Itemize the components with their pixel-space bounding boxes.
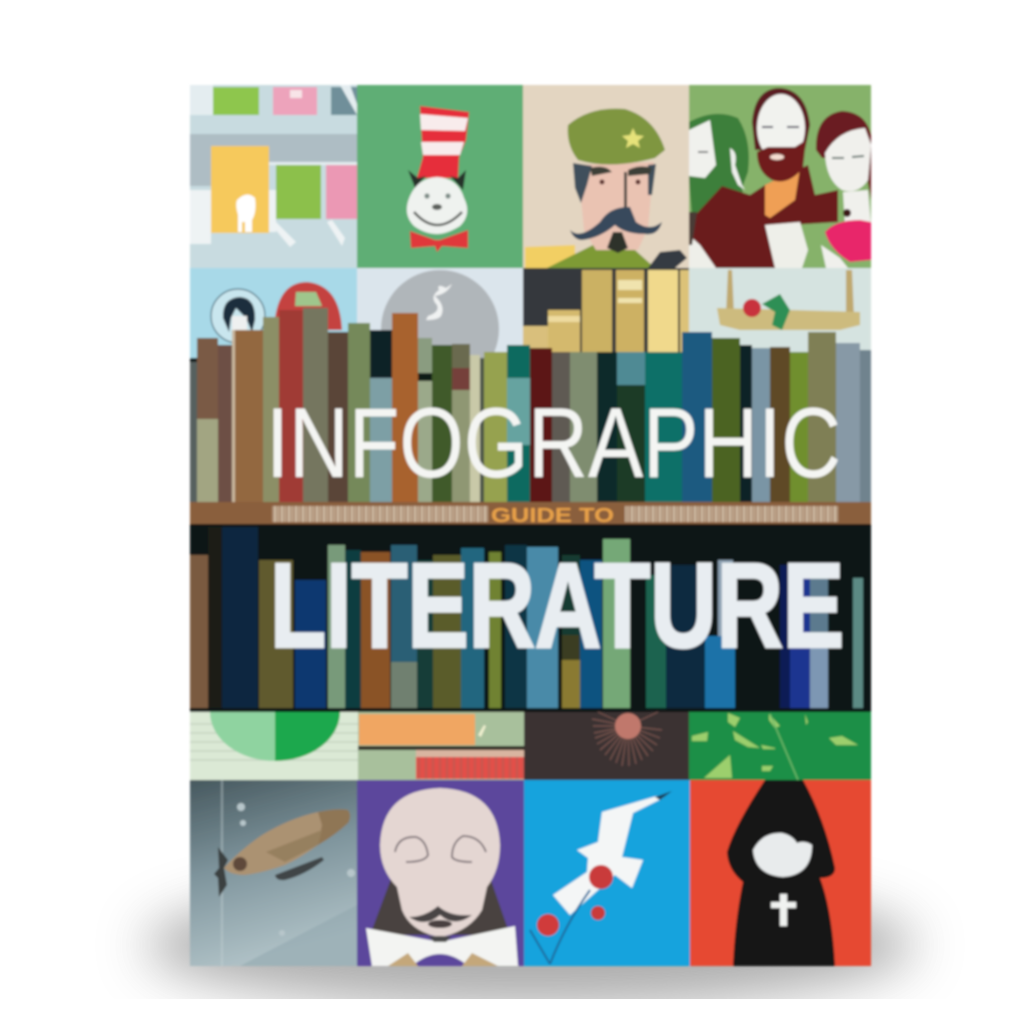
panel: revolutionary portrait <box>523 85 689 269</box>
moustache <box>409 906 472 942</box>
panel: nun <box>690 780 871 966</box>
bookshelf: lower row <box>190 524 871 712</box>
icon: habit <box>727 780 835 966</box>
face <box>578 162 654 250</box>
eyes <box>395 836 486 862</box>
figure: lower faces <box>765 222 808 268</box>
panel: gold books <box>523 268 689 358</box>
decorative bubbles <box>237 803 355 936</box>
icon: portrait circle <box>211 289 265 343</box>
panel: bearded group <box>689 85 871 269</box>
panel: portrait roundels <box>190 268 357 358</box>
hair <box>370 860 510 935</box>
figure: jacket <box>689 165 838 268</box>
figure: right woman <box>816 111 871 268</box>
panel: abstract building <box>190 85 357 269</box>
subtitle: GUIDE TO: GUIDE TO <box>491 505 614 527</box>
icon: cat face <box>407 177 467 234</box>
panel: rose on tray <box>689 268 871 352</box>
beret <box>568 109 665 165</box>
panel: green semicircle <box>190 712 358 780</box>
icon: face <box>753 833 812 877</box>
title: LITERATURE: LITERATURE <box>270 537 844 673</box>
icon: sun rays <box>592 712 662 766</box>
panel: Shakespeare <box>357 780 524 966</box>
panel: grey dome with smoke <box>357 268 523 388</box>
figure: left green hair <box>689 114 749 225</box>
ground shadow <box>145 883 915 1007</box>
figure: center bearded man <box>752 88 810 182</box>
icon: striped hat <box>417 106 469 178</box>
icon: star <box>622 128 644 148</box>
collar <box>366 926 518 966</box>
panel: green leaves <box>689 712 871 780</box>
panel: seagull <box>524 780 690 966</box>
icon: red arch <box>274 282 342 330</box>
icon: cross <box>771 894 796 926</box>
book cover <box>190 85 871 966</box>
icon: airship <box>214 809 350 897</box>
wooden shelf <box>190 502 871 524</box>
bookshelf: upper row <box>190 308 871 502</box>
icon: bow tie <box>410 230 468 252</box>
panel: cat in the hat <box>357 85 523 269</box>
panel: orange and red bars <box>358 712 524 780</box>
icon: red berries and stems <box>530 865 613 964</box>
mustache <box>570 207 662 240</box>
icon: cat ears <box>408 170 466 190</box>
head <box>380 788 500 936</box>
uniform <box>547 243 655 268</box>
icon: bird <box>553 791 672 915</box>
title: INFOGRAPHIC: INFOGRAPHIC <box>266 387 841 498</box>
panel: dark sun <box>524 712 689 780</box>
panel: zeppelin <box>190 780 357 966</box>
